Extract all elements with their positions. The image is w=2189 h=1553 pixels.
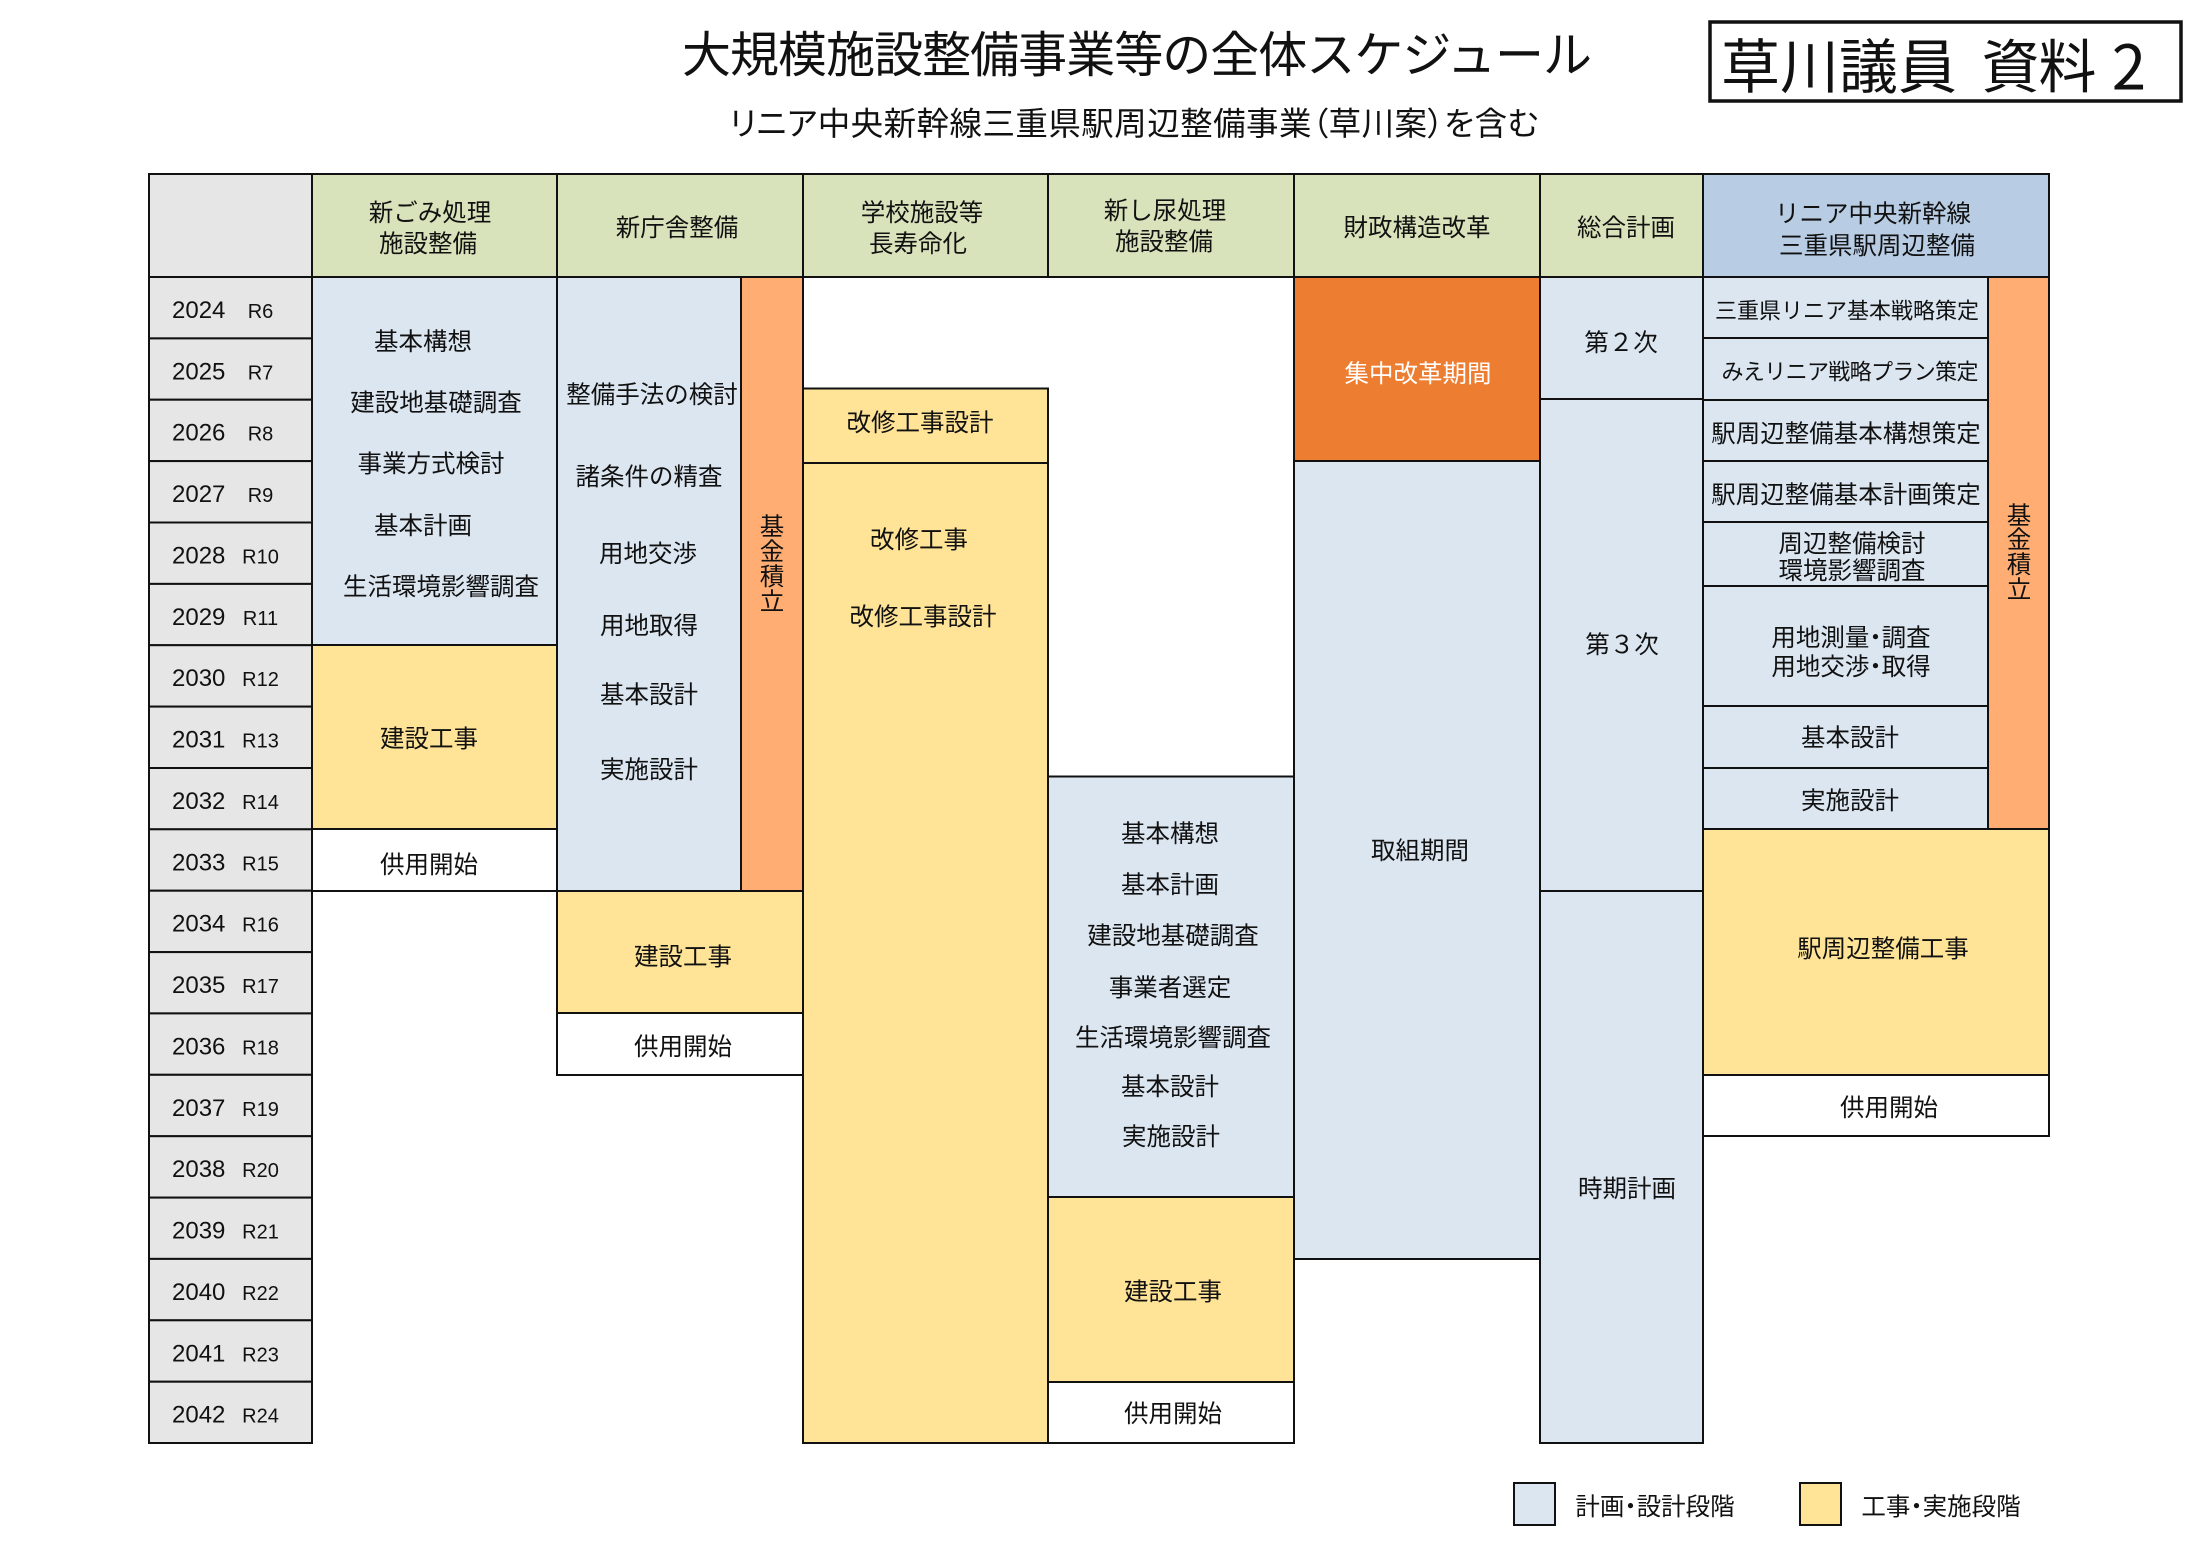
panel: year axis: R10 (242, 546, 279, 568)
panel: 総合計画 (1540, 174, 1703, 1443)
panel: year axis: 2036 (172, 1033, 225, 1060)
panel: year axis: R9 (248, 485, 273, 507)
panel: year axis: R19 (242, 1099, 279, 1121)
panel: 新庁舎整備: 整備手法の検討 (566, 376, 738, 411)
panel: リニア中央新幹線三重県駅周辺整備: 駅周辺整備工事 (1797, 930, 1969, 965)
panel: 財政構造改革: 集中改革期間 (1344, 355, 1492, 390)
panel: year axis: 2029 (172, 604, 225, 631)
panel: 総合計画: 第３次 (1585, 626, 1659, 661)
panel: year axis: R17 (242, 976, 279, 998)
panel: 新ごみ処理施設整備: 供用開始 (380, 846, 478, 881)
panel: 新庁舎整備: 供用開始 (634, 1028, 732, 1063)
panel: 学校施設等長寿命化: 改修工事設計 (846, 404, 994, 439)
panel: year axis: R12 (242, 669, 279, 691)
panel: 新ごみ処理施設整備: 施設整備 (379, 225, 477, 260)
panel: 新庁舎整備: 積 (760, 558, 784, 593)
panel: 新し尿処理施設整備: 実施設計 (1122, 1118, 1220, 1153)
panel: 新庁舎整備: 金 (760, 533, 784, 568)
panel: リニア中央新幹線三重県駅周辺整備: 用地交渉・取得 (1771, 648, 1931, 683)
panel: 新し尿処理施設整備 (1048, 174, 1294, 1443)
panel: year axis: 2039 (172, 1218, 225, 1245)
panel: リニア中央新幹線三重県駅周辺整備: 金 (2007, 521, 2031, 556)
panel: リニア中央新幹線三重県駅周辺整備: 駅周辺整備基本構想策定 (1711, 415, 1981, 450)
panel: 学校施設等長寿命化: 長寿命化 (869, 225, 967, 260)
panel: year axis: R16 (242, 915, 279, 937)
panel: 学校施設等長寿命化 (803, 174, 1048, 1443)
panel: year axis: R14 (242, 792, 279, 814)
panel: 総合計画: 第２次 (1584, 324, 1658, 359)
panel: 新し尿処理施設整備: 施設整備 (1115, 223, 1213, 258)
panel: year axis: R6 (248, 301, 273, 323)
panel: year axis: R21 (242, 1222, 279, 1244)
panel: 新ごみ処理施設整備: 新ごみ処理 (369, 194, 491, 229)
panel: 新し尿処理施設整備: 生活環境影響調査 (1075, 1019, 1271, 1054)
panel: 新し尿処理施設整備: 建設地基礎調査 (1087, 917, 1259, 952)
panel: year axis: R7 (248, 362, 273, 384)
panel: 新し尿処理施設整備: 基本構想 (1121, 815, 1219, 850)
panel: 新ごみ処理施設整備: 基本計画 (374, 507, 472, 542)
panel: 新し尿処理施設整備: 新し尿処理 (1104, 192, 1226, 227)
panel: year axis: 2031 (172, 727, 225, 754)
panel: year axis: 2027 (172, 481, 225, 508)
panel: year axis: 2034 (172, 911, 225, 938)
panel: 新庁舎整備 (557, 174, 803, 1075)
legend: 工事・実施段階: 工事・実施段階 (1861, 1488, 2021, 1523)
panel: リニア中央新幹線三重県駅周辺整備: 基 (2007, 497, 2031, 532)
panel: year axis: 2041 (172, 1340, 225, 1367)
panel: year axis: R24 (242, 1406, 279, 1428)
panel: 新庁舎整備: 基 (760, 508, 784, 543)
panel: year axis: R11 (243, 608, 278, 630)
panel: year axis: R20 (242, 1160, 279, 1182)
panel: 学校施設等長寿命化: 改修工事 (870, 521, 968, 556)
panel: 新庁舎整備: 建設工事 (634, 938, 732, 973)
panel: 新庁舎整備: 諸条件の精査 (576, 458, 722, 493)
panel: 新ごみ処理施設整備: 基本構想 (374, 323, 472, 358)
panel: リニア中央新幹線三重県駅周辺整備: 基本設計 (1801, 719, 1899, 754)
panel: 新し尿処理施設整備: 基本設計 (1121, 1068, 1219, 1103)
panel: year axis: 2042 (172, 1402, 225, 1429)
panel: リニア中央新幹線三重県駅周辺整備: 周辺整備検討 (1778, 525, 1926, 560)
panel: リニア中央新幹線三重県駅周辺整備: 供用開始 (1840, 1089, 1938, 1124)
panel: 総合計画: 総合計画 (1577, 209, 1675, 244)
badge: 草川議員 資料2: 資料 (1982, 20, 2096, 104)
panel: 新し尿処理施設整備: 基本計画 (1121, 866, 1219, 901)
panel: リニア中央新幹線三重県駅周辺整備: 三重県リニア基本戦略策定 (1715, 293, 1979, 325)
panel: year axis: 2030 (172, 665, 225, 692)
panel: 学校施設等長寿命化: 学校施設等 (861, 194, 983, 229)
panel: year axis: 2032 (172, 788, 225, 815)
panel: リニア中央新幹線三重県駅周辺整備: 駅周辺整備基本計画策定 (1711, 476, 1981, 511)
panel: 新ごみ処理施設整備: 生活環境影響調査 (343, 568, 539, 603)
panel: 新庁舎整備: 実施設計 (600, 751, 698, 786)
panel: リニア中央新幹線三重県駅周辺整備: 三重県駅周辺整備 (1779, 227, 1975, 262)
panel: 財政構造改革: 財政構造改革 (1344, 209, 1490, 244)
title: 大規模施設整備事業等の全体スケジュール (682, 16, 1592, 87)
panel: year axis (149, 174, 312, 1443)
subtitle: リニア中央新幹線三重県駅周辺整備事業（草川案）を含む (730, 98, 1538, 145)
panel: year axis: R22 (242, 1283, 279, 1305)
panel: 新庁舎整備: 用地交渉 (599, 535, 697, 570)
panel: 新し尿処理施設整備: 供用開始 (1124, 1395, 1222, 1430)
panel: 総合計画: 時期計画 (1578, 1170, 1676, 1205)
panel: 学校施設等長寿命化: 改修工事設計 (850, 598, 996, 633)
panel: 新ごみ処理施設整備: 建設地基礎調査 (350, 384, 522, 419)
panel: 新庁舎整備: 用地取得 (600, 607, 698, 642)
panel: year axis: 2028 (172, 542, 225, 570)
panel: year axis: 2037 (172, 1095, 225, 1122)
panel: year axis: 2035 (172, 972, 225, 999)
panel: 新ごみ処理施設整備: 事業方式検討 (358, 445, 504, 480)
panel: year axis: 2038 (172, 1156, 225, 1183)
badge: 草川議員 資料2: 草川議員 (1721, 20, 1957, 105)
panel: 新庁舎整備: 新庁舎整備 (616, 209, 738, 244)
panel: リニア中央新幹線三重県駅周辺整備: 積 (2007, 546, 2031, 581)
panel: year axis: 2033 (172, 849, 225, 876)
panel: リニア中央新幹線三重県駅周辺整備: 実施設計 (1801, 782, 1899, 817)
panel: リニア中央新幹線三重県駅周辺整備: 環境影響調査 (1778, 552, 1926, 587)
panel: 財政構造改革 (1294, 174, 1540, 1259)
legend: 工事・実施段階 (1800, 1483, 2021, 1525)
panel: year axis: R13 (242, 731, 279, 753)
legend: 計画・設計段階: 計画・設計段階 (1575, 1488, 1735, 1523)
panel: year axis: R8 (248, 424, 273, 446)
panel: 新ごみ処理施設整備: 建設工事 (380, 720, 478, 755)
panel: year axis: R15 (242, 853, 279, 875)
panel: year axis: 2026 (172, 420, 225, 447)
legend: 計画・設計段階 (1514, 1483, 1735, 1525)
panel: year axis: 2040 (172, 1279, 225, 1306)
panel: リニア中央新幹線三重県駅周辺整備: 用地測量・調査 (1771, 619, 1931, 654)
panel: 新ごみ処理施設整備 (312, 174, 557, 891)
panel: year axis: 2024 (172, 297, 225, 324)
badge: 草川議員 資料2: 2 (2112, 17, 2146, 107)
panel: year axis: R23 (242, 1344, 279, 1366)
panel: year axis: R18 (242, 1037, 279, 1059)
panel: 新し尿処理施設整備: 建設工事 (1124, 1273, 1222, 1308)
panel: 財政構造改革: 取組期間 (1371, 832, 1469, 867)
panel: リニア中央新幹線三重県駅周辺整備 (1703, 174, 2049, 1136)
panel: 新し尿処理施設整備: 事業者選定 (1109, 969, 1231, 1004)
panel: 新庁舎整備: 基本設計 (600, 676, 698, 711)
panel: リニア中央新幹線三重県駅周辺整備: 立 (2007, 571, 2031, 606)
panel: 新庁舎整備: 立 (760, 583, 784, 618)
panel: year axis: 2025 (172, 358, 225, 385)
badge: 草川議員 資料2 (1710, 17, 2181, 107)
panel: リニア中央新幹線三重県駅周辺整備: みえリニア戦略プラン策定 (1722, 354, 1978, 386)
panel: リニア中央新幹線三重県駅周辺整備: リニア中央新幹線 (1775, 195, 1971, 230)
